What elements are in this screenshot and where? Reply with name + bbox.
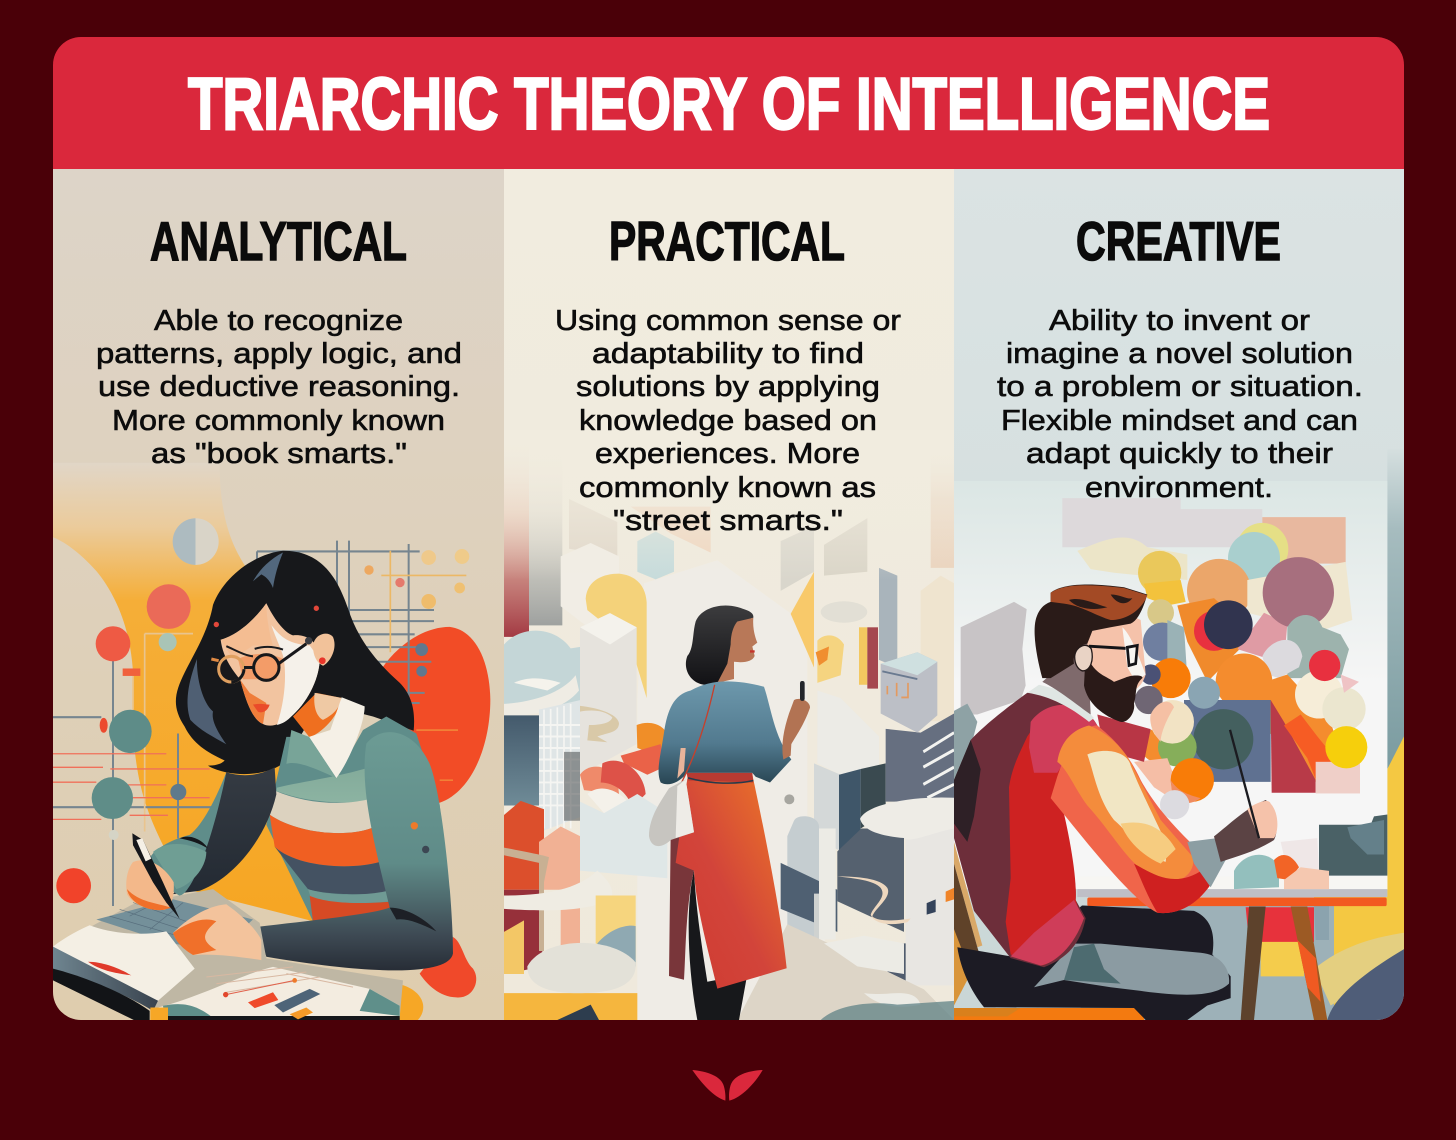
pen xyxy=(132,833,180,919)
description: analytical: patterns, apply logic, and xyxy=(96,338,462,370)
legs xyxy=(957,905,1231,1020)
column text: analytical xyxy=(96,210,462,470)
woman figure xyxy=(649,605,810,1020)
heading: analytical: ANALYTICAL xyxy=(150,210,407,272)
torso xyxy=(954,693,1097,967)
description: practical: experiences. More xyxy=(595,438,860,470)
heading: practical: PRACTICAL xyxy=(609,210,845,272)
description: analytical: Able to recognize xyxy=(154,305,403,337)
panel: creative xyxy=(954,169,1404,1023)
hair xyxy=(1035,584,1147,678)
legs xyxy=(689,871,747,1020)
paint blobs xyxy=(1077,517,1367,819)
neck xyxy=(1042,642,1091,715)
description: practical: solutions by applying xyxy=(576,371,880,403)
face xyxy=(221,603,320,726)
red shapes xyxy=(621,744,664,775)
illustration: painter at canvas xyxy=(954,449,1404,1023)
column text: practical xyxy=(555,210,901,537)
sleeve xyxy=(1051,725,1212,913)
description: analytical xyxy=(96,305,462,470)
description: practical: Using common sense or xyxy=(555,305,901,337)
right wall xyxy=(1387,449,1404,769)
ribbon xyxy=(580,706,619,742)
description: practical xyxy=(555,305,901,537)
right arm xyxy=(256,732,453,970)
dress back panel xyxy=(669,828,694,980)
neck xyxy=(293,693,341,738)
back hair xyxy=(176,551,414,774)
glasses xyxy=(211,644,306,682)
yellow shape by book xyxy=(400,985,424,1020)
description: practical: "street smarts." xyxy=(613,505,843,537)
description: analytical: as "book smarts." xyxy=(151,438,407,470)
description: creative: imagine a novel solution xyxy=(1006,338,1353,370)
belt xyxy=(687,773,753,782)
red blob xyxy=(381,627,490,803)
description: practical: adaptability to find xyxy=(592,338,864,370)
dress xyxy=(676,775,787,989)
illustration: woman in the city xyxy=(504,441,954,1020)
description: practical: knowledge based on xyxy=(579,405,877,437)
illustration: woman studying with book xyxy=(53,463,490,1028)
description: practical: commonly known as xyxy=(579,472,876,504)
description: analytical: use deductive reasoning. xyxy=(98,371,460,403)
orange backdrop xyxy=(53,463,320,923)
easel legs xyxy=(1241,907,1266,1020)
description: creative xyxy=(997,305,1363,504)
white central block xyxy=(637,560,837,1020)
bodice xyxy=(659,681,791,784)
description: creative: Flexible mindset and can xyxy=(1001,405,1358,437)
second hand xyxy=(173,904,261,960)
description: analytical: More commonly known xyxy=(112,405,445,437)
glasses xyxy=(1089,645,1137,665)
logo xyxy=(692,1070,763,1101)
strap xyxy=(681,685,715,784)
grid lines xyxy=(53,541,466,906)
grey-teal canvas corner xyxy=(1319,815,1387,876)
description: creative: to a problem or situation. xyxy=(997,371,1363,403)
panel: practical xyxy=(504,169,954,1020)
collar xyxy=(309,697,365,778)
writing hand xyxy=(126,860,174,910)
hair xyxy=(686,605,753,685)
right blocks xyxy=(817,691,879,775)
face xyxy=(1087,616,1146,696)
description: creative: adapt quickly to their xyxy=(1026,438,1333,470)
panel: analytical xyxy=(53,169,504,1028)
hand and brush xyxy=(1214,800,1277,862)
column text: creative xyxy=(997,210,1363,504)
description: creative: Ability to invent or xyxy=(1049,305,1310,337)
distant towers xyxy=(504,484,954,721)
book xyxy=(92,889,403,1018)
data circles xyxy=(56,518,469,903)
shirt cuff xyxy=(1187,838,1226,887)
chair xyxy=(954,911,974,1005)
soft wash behind text xyxy=(504,430,954,580)
beard xyxy=(1084,653,1142,722)
left cloud and tower xyxy=(504,630,580,704)
ear xyxy=(1075,645,1092,671)
description: creative: environment. xyxy=(1085,472,1273,504)
canvas xyxy=(954,481,1387,889)
heading: creative: CREATIVE xyxy=(1076,210,1281,272)
left arm xyxy=(173,767,276,894)
torso base xyxy=(266,717,453,940)
sweater stripes xyxy=(270,767,400,921)
red blob behind elbow xyxy=(420,936,476,997)
left forearm xyxy=(150,772,226,896)
arm and hand xyxy=(782,699,810,759)
header banner xyxy=(53,37,1404,169)
under-table xyxy=(1081,905,1334,1020)
collar xyxy=(1027,685,1094,722)
bag xyxy=(649,779,694,846)
hair highlights xyxy=(253,552,283,588)
table xyxy=(1077,876,1387,890)
ear xyxy=(313,634,335,666)
yellow arch xyxy=(586,574,647,698)
face and neck xyxy=(717,618,757,683)
